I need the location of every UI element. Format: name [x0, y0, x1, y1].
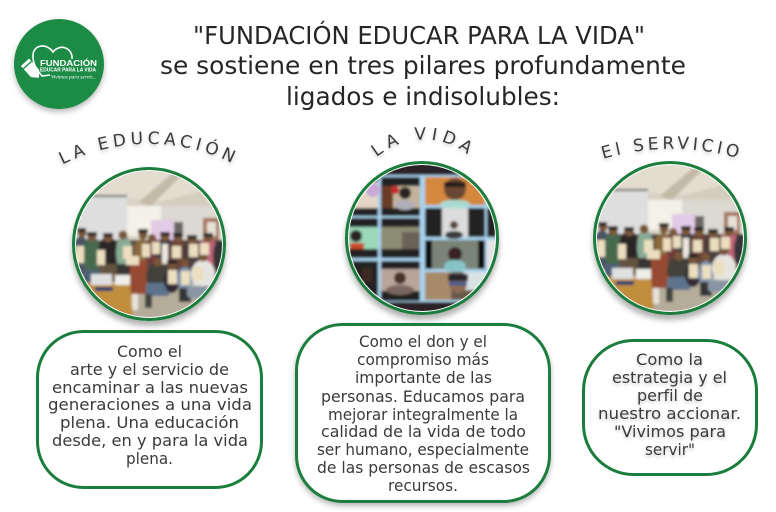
heading: la vida: LA VIDA [370, 127, 472, 158]
panel: la educación text: arte y el servicio de [70, 361, 229, 379]
panel: la vida text: de las personas de escasos [317, 459, 530, 477]
icon: heart outline [33, 46, 72, 76]
photo circle: la vida [342, 158, 502, 318]
panel: la vida text: ser humano, especialmente [317, 441, 529, 459]
panel: la vida text: importante de las [355, 369, 492, 387]
panel: la vida text: calidad de la vida de todo [321, 423, 526, 441]
logo badge [14, 19, 104, 109]
panel: la vida text: personas. Educamos para [321, 388, 525, 406]
heading: la educación: LA EDUCACIÓN [58, 131, 236, 166]
panel: el servicio text: estrategia y el [612, 369, 727, 387]
panel: la vida text: mejorar integralmente la [328, 406, 518, 424]
panel: el servicio text: Como la [636, 351, 703, 369]
panel: el servicio text: servir" [645, 441, 695, 459]
title: se sostiene en tres pilares profundamente [160, 51, 686, 80]
heading: el servicio: El SERVICIO [600, 136, 740, 162]
title: "FUNDACIÓN EDUCAR PARA LA VIDA" [193, 20, 645, 50]
panel: la educación text: encaminar a las nuevas [52, 379, 248, 397]
icon: pencil [21, 59, 43, 82]
photo circle: el servicio [590, 158, 752, 320]
panel: el servicio text [584, 340, 756, 474]
panel: la vida text: compromiso más [357, 351, 489, 369]
title: ligados e indisolubles: [286, 82, 560, 111]
panel: la vida text: Como el don y el [359, 333, 487, 351]
panel: la educación text: desde, en y para la vida [52, 432, 248, 450]
panel: la educación text: generaciones a una vida [48, 396, 252, 414]
panel: la educación text: plena. [126, 450, 173, 468]
panel: el servicio text: "Vivimos para [614, 423, 726, 441]
panel: la vida text [296, 324, 550, 502]
logo subtitle: EDUCAR PARA LA VIDA [40, 68, 96, 74]
photo circle: la educación [69, 164, 231, 326]
panel: el servicio text: nuestro accionar. [598, 405, 741, 423]
panel: la educación text [38, 332, 262, 488]
panel: la educación text: Como el [117, 343, 182, 361]
panel: el servicio text: perfil de [637, 387, 703, 405]
panel: la educación text: plena. Una educación [60, 414, 239, 432]
logo name: FUNDACIÓN [40, 57, 97, 68]
panel: la vida text: recursos. [388, 477, 458, 495]
title [160, 20, 686, 111]
logo tagline: Vivimos para servir... [51, 76, 96, 80]
